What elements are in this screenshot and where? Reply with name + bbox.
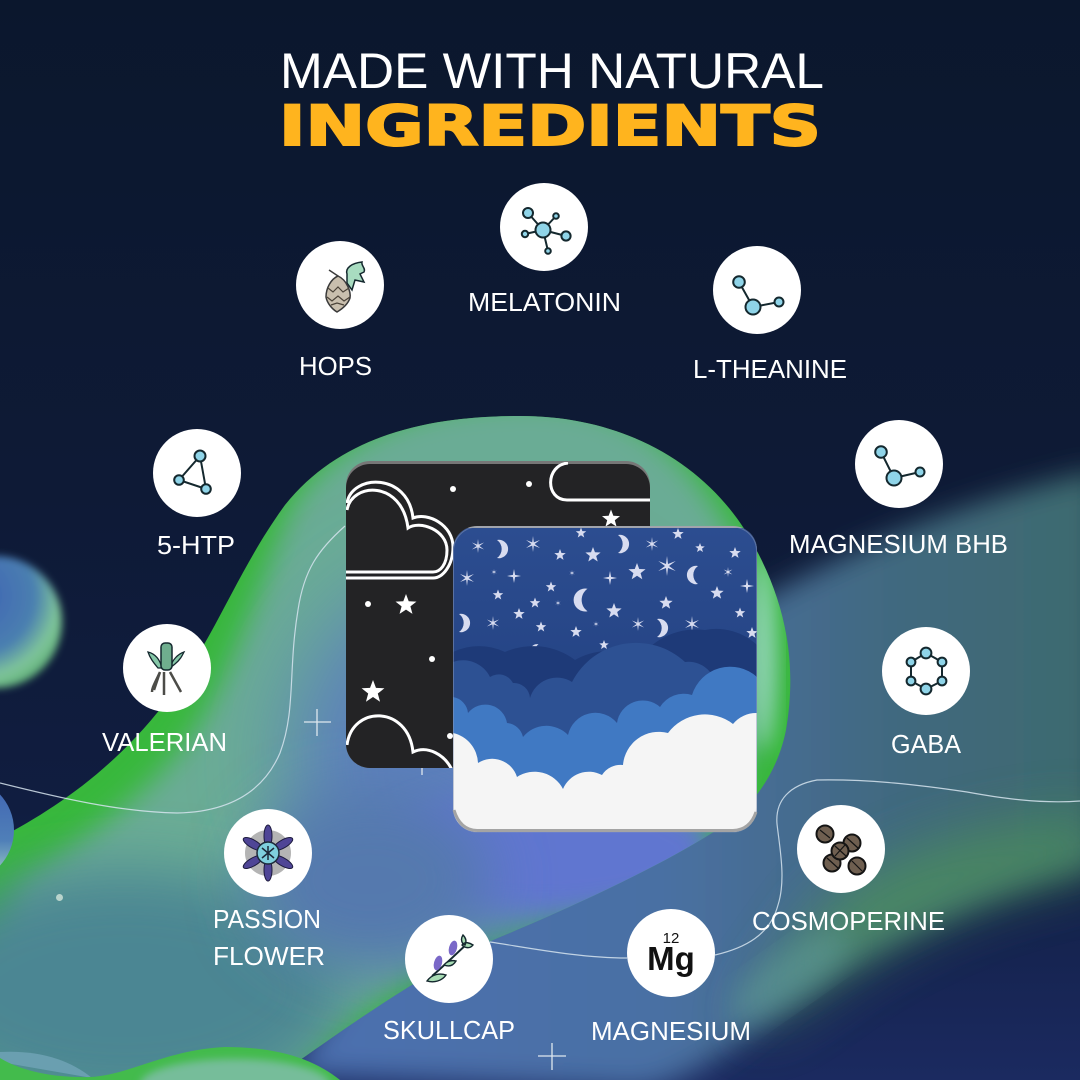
label: GABA (891, 729, 962, 759)
ingredient: magnesium BHB (789, 420, 1008, 559)
ingredient: magnesium (591, 909, 751, 1046)
label: FLOWER (213, 941, 325, 971)
label: MAGNESIUM BHB (789, 529, 1008, 559)
sky stars and moons (459, 528, 758, 658)
label: MAGNESIUM (591, 1016, 751, 1046)
green blob (0, 400, 820, 1080)
cloud layer: mid blue (453, 667, 757, 800)
connecting lines (0, 526, 1080, 958)
ingredient: magnesium: Mg (647, 940, 695, 977)
cloud layer: deep navy (454, 629, 756, 697)
glass lens bottom left (0, 1052, 92, 1078)
ingredient: skullcap (383, 915, 515, 1045)
title line 1: MADE WITH NATURAL (280, 43, 824, 99)
ingredient: cosmoperine (752, 805, 945, 936)
ingredient: l-theanine (693, 246, 847, 384)
label: MELATONIN (468, 287, 621, 317)
title line 2: INGREDIENTS (279, 94, 821, 158)
label: SKULLCAP (383, 1015, 515, 1045)
label: PASSION (213, 904, 321, 934)
label: HOPS (299, 351, 372, 381)
plus marks and dot (56, 709, 566, 1070)
label (213, 904, 325, 971)
ingredient: hops (296, 241, 384, 381)
product: black coaster (340, 461, 655, 770)
label: COSMOPERINE (752, 906, 945, 936)
label: 5-HTP (157, 530, 235, 560)
ingredient: magnesium: 12 (663, 930, 679, 947)
blurred orb left (0, 556, 62, 688)
label: VALERIAN (102, 727, 227, 757)
product: blue night-sky coaster (453, 526, 758, 832)
ingredient: GABA (882, 627, 970, 759)
ingredient: melatonin (468, 183, 621, 317)
title (279, 43, 824, 158)
cloud layer: dark blue (453, 643, 710, 737)
left edge orb (0, 778, 14, 882)
ingredient: valerian (102, 624, 227, 757)
small corner blob (0, 1047, 340, 1080)
label: L-THEANINE (693, 354, 847, 384)
ingredient: 5-HTP (153, 429, 241, 560)
ingredient: passion flower (213, 809, 325, 971)
aurora band (290, 470, 1080, 1080)
cloud layer: white (453, 713, 757, 832)
